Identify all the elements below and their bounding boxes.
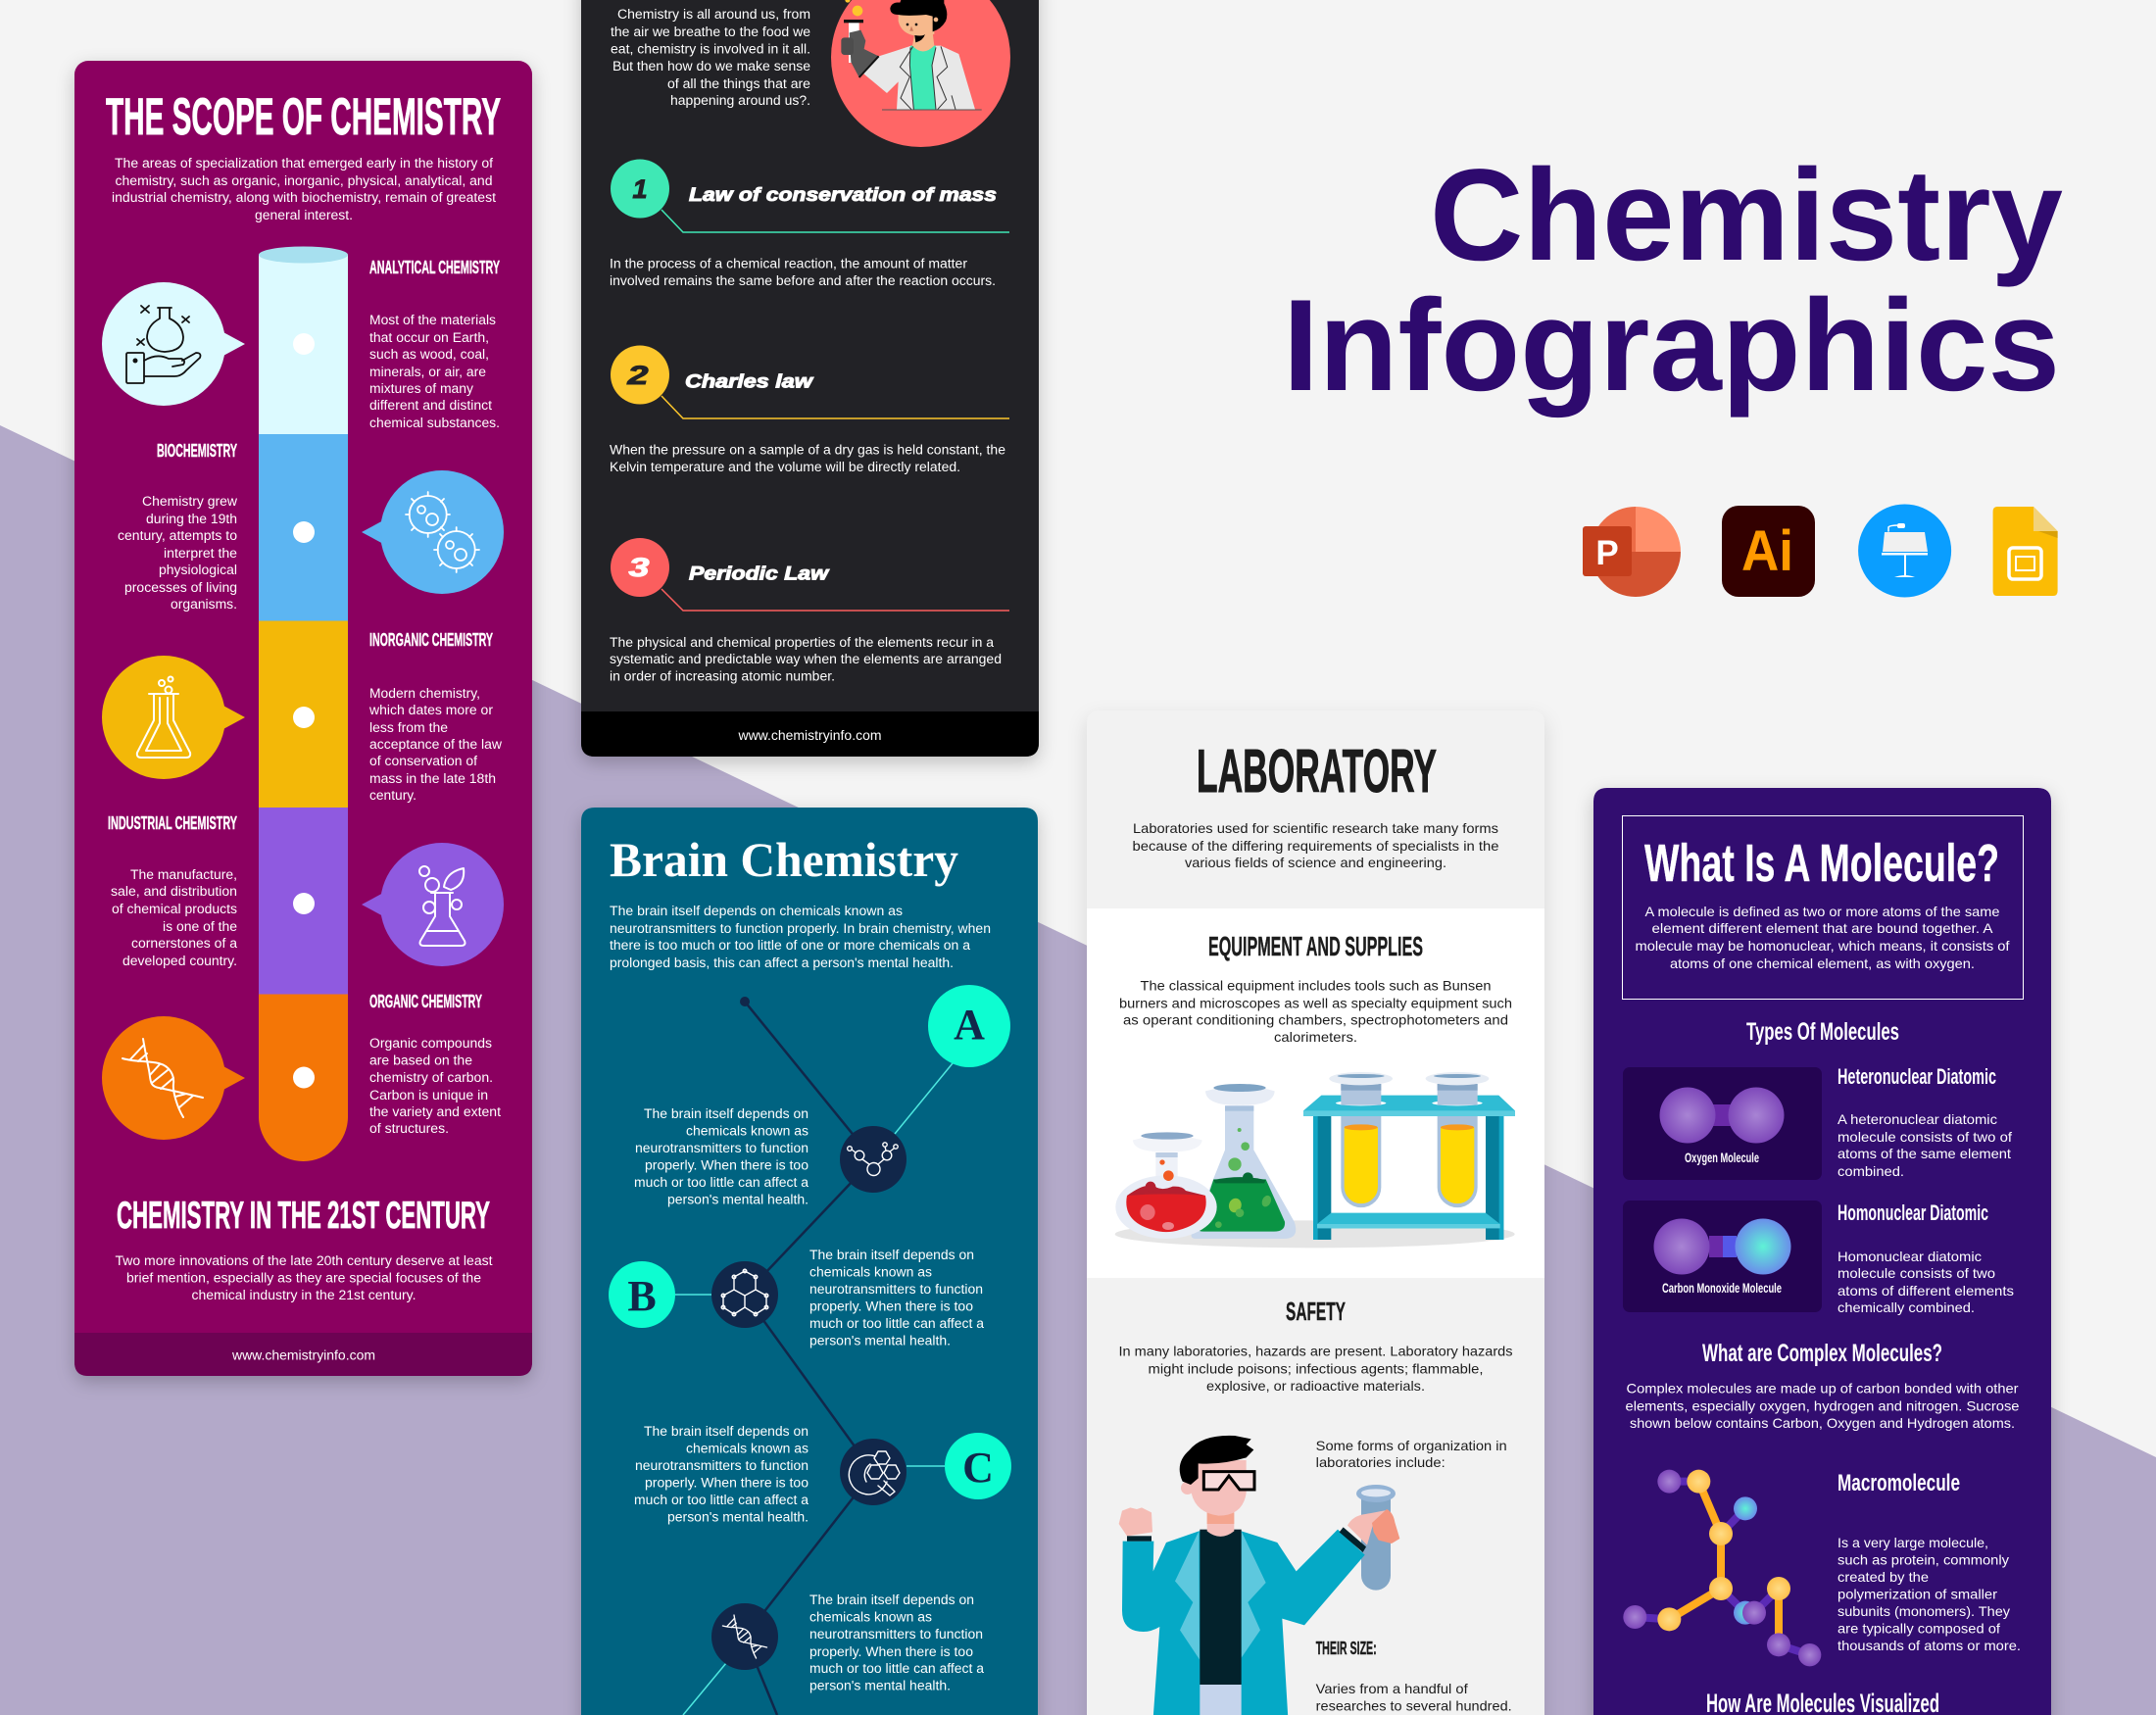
test tube chart [259, 247, 348, 1161]
section: 21st century [116, 1195, 493, 1302]
intro text: prolonged basis, this can affect a person's mental health. [610, 956, 954, 970]
main title: Chemistry [1430, 143, 2063, 288]
section: analytical chemistry: that occur on Earth, [369, 330, 489, 345]
intro text: But then how do we make sense [612, 59, 810, 74]
outlined intro box: element different element that are bound together. A [1652, 920, 1993, 936]
intro text: there is too much or too little of one or more chemicals on a [610, 938, 970, 953]
macromolecule text: such as protein, commonly [1838, 1552, 2009, 1568]
section: biochemistry: BIOCHEMISTRY [157, 441, 237, 461]
outlined intro box: What Is A Molecule? [1644, 834, 1999, 893]
software icons [1583, 504, 2058, 598]
text block C: much or too little can affect a [634, 1493, 809, 1507]
section: 21st century: CHEMISTRY IN THE 21ST CENTURY [117, 1195, 490, 1237]
homonuclear diatomic: Homonuclear Diatomic [1838, 1200, 1988, 1225]
timeline connector [675, 997, 953, 1715]
white band: equipment [1087, 908, 1544, 1278]
text block A [634, 1106, 809, 1207]
equipment text: as operant conditioning chambers, spectrophotometers and [1123, 1011, 1508, 1027]
homonuclear diatomic: chemically combined. [1838, 1299, 1975, 1315]
text block D: The brain itself depends on [809, 1592, 974, 1607]
icon: Illustrator: Ai [1741, 519, 1793, 583]
section: biochemistry: interpret the [164, 546, 237, 561]
icon: Illustrator [1722, 506, 1815, 597]
section: analytical chemistry: ANALYTICAL CHEMISTRY [369, 258, 500, 277]
law 1 [610, 159, 1009, 288]
text block B: chemicals known as [809, 1265, 932, 1280]
macromolecule text: polymerization of smaller [1838, 1587, 1997, 1602]
heading: types of molecules: Types Of Molecules [1746, 1018, 1899, 1046]
heading: LABORATORY [1197, 738, 1437, 806]
heading: THE SCOPE OF CHEMISTRY [106, 88, 501, 146]
intro text: Laboratories used for scientific research take many forms [1133, 820, 1498, 836]
section: biochemistry [118, 441, 237, 612]
heteronuclear diatomic: atoms of the same element [1838, 1146, 2011, 1161]
macromolecule text: Is a very large molecule, [1838, 1535, 1988, 1550]
homonuclear diatomic [1838, 1200, 2014, 1315]
text block D: chemicals known as [809, 1610, 932, 1625]
macromolecule text: Macromolecule [1838, 1470, 1960, 1496]
intro text [611, 7, 810, 108]
card background [74, 61, 532, 1376]
homonuclear diatomic: atoms of different elements [1838, 1283, 2014, 1298]
heading: safety: SAFETY [1286, 1297, 1346, 1326]
macromolecule text [1838, 1470, 2021, 1653]
badge C [945, 1433, 1011, 1499]
section: biochemistry: processes of living [124, 580, 237, 595]
section: biochemistry: during the 19th [146, 512, 237, 526]
outlined intro box [1623, 815, 2023, 1000]
icon: PowerPoint: P [1595, 534, 1619, 572]
organization text [1316, 1438, 1507, 1470]
section: organic chemistry: of structures. [369, 1121, 449, 1136]
panel: what is a molecule [1593, 788, 2051, 1715]
text block C: The brain itself depends on [644, 1424, 808, 1439]
illustration: flasks and test tube rack [1115, 1072, 1515, 1248]
number badge 2: 2 [626, 361, 649, 390]
law 2: Charles law [685, 372, 813, 392]
text block B: much or too little can affect a [809, 1316, 985, 1331]
carbon monoxide molecule box [1623, 1200, 1822, 1312]
text block D: properly. When there is too [809, 1644, 973, 1659]
section: inorganic chemistry: Modern chemistry, [369, 686, 480, 701]
heteronuclear diatomic: combined. [1838, 1163, 1904, 1179]
text block D: person's mental health. [809, 1679, 951, 1693]
oxygen molecule box: Oxygen Molecule [1685, 1150, 1759, 1165]
card background [581, 808, 1038, 1715]
intro text [112, 156, 496, 222]
icon: DNA bubble [102, 1016, 245, 1140]
section: analytical chemistry: mixtures of many [369, 381, 473, 396]
intro text: because of the differing requirements of specialists in the [1133, 838, 1499, 854]
text block D [809, 1592, 985, 1693]
icon: Google Slides [1993, 507, 2058, 596]
icon: PowerPoint [1583, 507, 1681, 597]
outlined intro box: molecule may be homonuclear, which means, it consists of [1635, 938, 2010, 954]
organization text: Some forms of organization in [1316, 1438, 1507, 1453]
macromolecule text: created by the [1838, 1569, 1929, 1585]
main title [1283, 143, 2063, 418]
section: 21st century: Two more innovations of the late 20th century deserve at least [116, 1253, 493, 1268]
number badge 3 [611, 538, 669, 597]
panel: the scope of chemistry [74, 61, 532, 1376]
their size text: Varies from a handful of [1316, 1681, 1468, 1696]
safety text: In many laboratories, hazards are present. Laboratory hazards [1119, 1343, 1513, 1358]
section: organic chemistry: ORGANIC CHEMISTRY [369, 992, 482, 1011]
section: industrial chemistry: cornerstones of a [131, 936, 238, 951]
law 2: When the pressure on a sample of a dry gas is held constant, the [610, 443, 1005, 458]
text block B: person's mental health. [809, 1334, 951, 1348]
intro text: various fields of science and engineering. [1185, 855, 1446, 870]
section: organic chemistry [369, 992, 501, 1136]
their size text [1316, 1639, 1512, 1714]
footer [581, 711, 1039, 757]
intro text: general interest. [255, 208, 353, 222]
icon: bacteria bubble [362, 470, 504, 594]
law 1: involved remains the same before and after the reaction occurs. [610, 273, 996, 288]
section: inorganic chemistry: mass in the late 18th [369, 771, 496, 786]
oxygen molecule box [1623, 1067, 1822, 1180]
section: inorganic chemistry: less from the [369, 720, 448, 735]
text block C: neurotransmitters to function [635, 1458, 808, 1473]
section: biochemistry: organisms. [171, 597, 237, 612]
number badge 3: 3 [629, 553, 649, 582]
law 2 [610, 345, 1009, 474]
safety text [1119, 1343, 1513, 1394]
text block C [634, 1424, 809, 1525]
footer: www.chemistryinfo.com [231, 1347, 375, 1362]
complex molecules section: elements, especially oxygen, hydrogen and nitrogen. Sucrose [1625, 1397, 2020, 1413]
section: industrial chemistry: developed country. [122, 954, 237, 968]
intro text [610, 904, 991, 970]
icon: hand with flask bubble [102, 282, 245, 406]
intro text [1133, 820, 1499, 870]
section: inorganic chemistry: of conservation of [369, 754, 477, 768]
carbon monoxide molecule box: Carbon Monoxide Molecule [1662, 1280, 1782, 1296]
section: organic chemistry: the variety and extent [369, 1104, 501, 1119]
section: industrial chemistry: sale, and distribution [111, 884, 237, 899]
section: inorganic chemistry: century. [369, 788, 416, 803]
section: biochemistry: century, attempts to [118, 528, 237, 543]
section: industrial chemistry [108, 813, 238, 968]
intro text: neurotransmitters to function properly. In brain chemistry, when [610, 921, 991, 936]
complex molecules section: shown below contains Carbon, Oxygen and Hydrogen atoms. [1630, 1415, 2015, 1431]
complex molecules section: What are Complex Molecules? [1702, 1340, 1942, 1367]
intro text: Chemistry is all around us, from [617, 7, 810, 22]
icon: hexagon node [711, 1261, 778, 1328]
section: inorganic chemistry: acceptance of the law [369, 737, 502, 752]
macromolecule text: subunits (monomers). They [1838, 1603, 2010, 1619]
organization text: laboratories include: [1316, 1454, 1446, 1470]
badge C: C [962, 1444, 994, 1492]
badge B [609, 1261, 675, 1328]
their size text: THEIR SIZE: [1316, 1639, 1377, 1658]
section: industrial chemistry: is one of the [163, 919, 237, 934]
section: industrial chemistry: INDUSTRIAL CHEMISTRY [108, 813, 237, 833]
intro text: The areas of specialization that emerged early in the history of [115, 156, 493, 171]
law 3: in order of increasing atomic number. [610, 668, 835, 684]
text block A: much or too little can affect a [634, 1175, 809, 1190]
text block D: neurotransmitters to function [809, 1627, 983, 1642]
card background [581, 0, 1039, 757]
section: organic chemistry: chemistry of carbon. [369, 1070, 493, 1085]
intro text: happening around us?. [670, 93, 810, 108]
section: analytical chemistry: chemical substances. [369, 416, 500, 430]
text block A: person's mental health. [667, 1193, 808, 1207]
section: biochemistry: Chemistry grew [142, 494, 237, 509]
safety text: explosive, or radioactive materials. [1206, 1378, 1425, 1394]
macromolecule text: thousands of atoms or more. [1838, 1638, 2021, 1653]
icon: DNA node [711, 1603, 778, 1670]
number badge 1 [611, 159, 669, 218]
text block B: neurotransmitters to function [809, 1282, 983, 1297]
law 1: In the process of a chemical reaction, the amount of matter [610, 257, 968, 271]
section: industrial chemistry: The manufacture, [130, 867, 237, 882]
safety text: might include poisons; infectious agents; flammable, [1149, 1360, 1484, 1376]
icon: plant flask bubble [362, 843, 504, 966]
section: organic chemistry: Organic compounds [369, 1036, 492, 1051]
text block B [809, 1248, 985, 1348]
equipment text: The classical equipment includes tools such as Bunsen [1141, 978, 1492, 994]
text block A: properly. When there is too [645, 1158, 808, 1173]
card background [1593, 788, 2051, 1715]
intro text: of all the things that are [667, 76, 810, 91]
section: organic chemistry: Carbon is unique in [369, 1088, 488, 1102]
illustration: scientist with test tube [1119, 1436, 1399, 1715]
heading: equipment and supplies: EQUIPMENT AND SUPPLIES [1208, 931, 1423, 961]
heteronuclear diatomic: A heteronuclear diatomic [1838, 1111, 1997, 1127]
illustration: scientist in red circle [831, 0, 1010, 147]
footer: www.chemistryinfo.com [738, 727, 882, 743]
icon: molecule node [840, 1126, 906, 1193]
panel: laws of chemistry [581, 0, 1039, 757]
text block A: The brain itself depends on [644, 1106, 808, 1121]
icon: magnifier node [840, 1439, 906, 1505]
section: industrial chemistry: of chemical products [112, 902, 237, 916]
section: analytical chemistry: such as wood, coal, [369, 347, 489, 362]
intro text: The brain itself depends on chemicals known as [610, 904, 903, 918]
macromolecule text: are typically composed of [1838, 1621, 2000, 1637]
intro text: chemistry, such as organic, inorganic, physical, analytical, and [116, 173, 492, 188]
section: analytical chemistry: different and distinct [369, 398, 492, 413]
section: 21st century: chemical industry in the 21st century. [192, 1288, 416, 1302]
card background [1087, 710, 1544, 1715]
law 1: Law of conservation of mass [689, 185, 997, 206]
law 3: systematic and predictable way when the elements are arranged [610, 652, 1002, 666]
intro text: eat, chemistry is involved in it all. [611, 41, 810, 57]
text block A: chemicals known as [686, 1124, 808, 1139]
intro text: industrial chemistry, along with biochemistry, remain of greatest [112, 190, 496, 205]
illustration: macromolecule [1623, 1470, 1821, 1666]
homonuclear diatomic: molecule consists of two [1838, 1265, 1995, 1281]
equipment text: burners and microscopes as well as specialty equipment such [1119, 996, 1512, 1011]
text block C: chemicals known as [686, 1442, 808, 1456]
icon: Keynote [1858, 504, 1951, 598]
number badge 2 [611, 345, 669, 404]
section: analytical chemistry: minerals, or air, are [369, 365, 486, 379]
intro text: the air we breathe to the food we [611, 24, 810, 39]
section: analytical chemistry [369, 258, 500, 430]
text block A: neurotransmitters to function [635, 1141, 808, 1155]
law 3: The physical and chemical properties of the elements recur in a [610, 635, 994, 650]
complex molecules section: Complex molecules are made up of carbon bonded with other [1627, 1380, 2019, 1396]
law 3 [610, 538, 1009, 684]
badge A: A [954, 1001, 985, 1049]
heteronuclear diatomic [1838, 1064, 2012, 1179]
equipment text: calorimeters. [1274, 1029, 1357, 1045]
section: inorganic chemistry [368, 630, 502, 803]
panel: laboratory [1087, 710, 1544, 1715]
panel: brain chemistry [581, 808, 1038, 1715]
badge A [928, 985, 1010, 1067]
section: inorganic chemistry: INORGANIC CHEMISTRY [369, 630, 493, 650]
law 2: Kelvin temperature and the volume will be directly related. [610, 460, 960, 474]
text block C: properly. When there is too [645, 1476, 808, 1491]
main title: Infographics [1283, 273, 2060, 418]
footer [74, 1333, 532, 1376]
section: biochemistry: physiological [159, 563, 237, 577]
heteronuclear diatomic: molecule consists of two of [1838, 1129, 2012, 1145]
law 3: Periodic Law [689, 564, 829, 584]
outlined intro box: atoms of one chemical element, as with oxygen. [1670, 956, 1975, 971]
text block D: much or too little can affect a [809, 1661, 985, 1676]
section: organic chemistry: are based on the [369, 1053, 472, 1068]
section: analytical chemistry: Most of the materials [369, 313, 496, 327]
number badge 1: 1 [632, 174, 648, 204]
outlined intro box: A molecule is defined as two or more atoms of the same [1644, 904, 2000, 919]
their size text: researches to several hundred. [1316, 1698, 1512, 1714]
icon: flask bubble [102, 656, 245, 779]
badge B: B [627, 1272, 657, 1320]
complex molecules section [1625, 1340, 2020, 1431]
section: inorganic chemistry: which dates more or [368, 703, 494, 717]
text block B: The brain itself depends on [809, 1248, 974, 1262]
homonuclear diatomic: Homonuclear diatomic [1838, 1249, 1982, 1264]
equipment text [1119, 978, 1512, 1045]
text block B: properly. When there is too [809, 1299, 973, 1314]
heteronuclear diatomic: Heteronuclear Diatomic [1838, 1064, 1996, 1089]
text block C: person's mental health. [667, 1510, 808, 1525]
section: 21st century: brief mention, especially as they are special focuses of the [126, 1270, 481, 1286]
heading: Brain Chemistry [610, 832, 958, 887]
